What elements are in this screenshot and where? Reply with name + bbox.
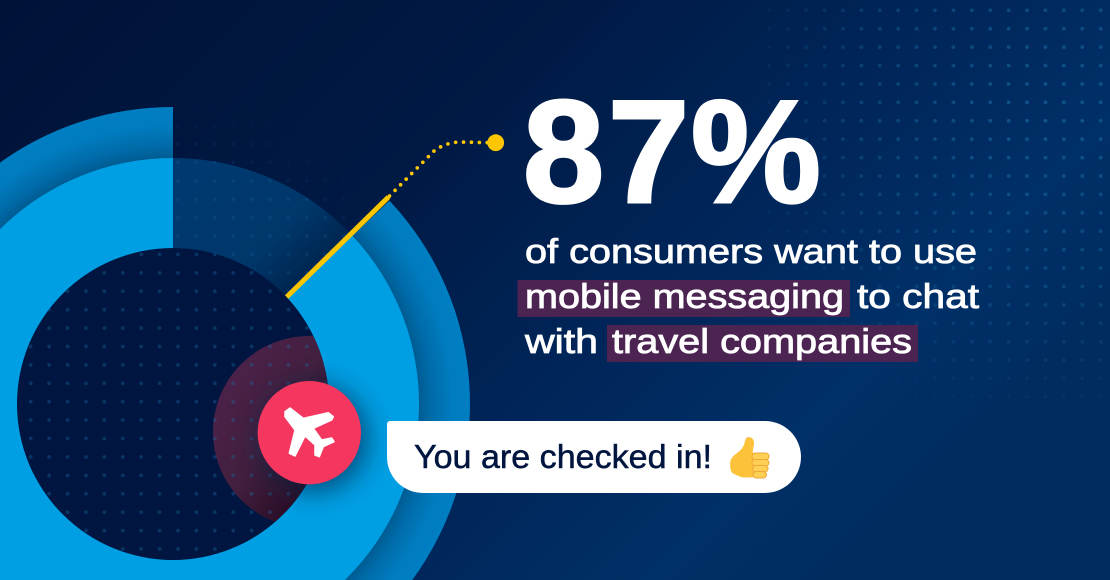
connector end dot xyxy=(487,134,504,151)
dotted connector xyxy=(390,142,489,196)
shadow under plane button xyxy=(260,384,368,492)
dot pattern: top right xyxy=(768,8,1102,380)
statistic: 87%: 87% xyxy=(523,70,821,233)
yellow marker line xyxy=(287,197,388,297)
middle ring sector xyxy=(0,158,419,580)
description text: of consumers want to use xyxy=(525,233,977,271)
chat bubble xyxy=(387,421,801,493)
icon: airplane xyxy=(285,408,334,457)
description text: to chat xyxy=(857,278,980,316)
burgundy accent circle xyxy=(213,336,328,522)
outer ring sector xyxy=(0,107,470,580)
description text: mobile messaging xyxy=(525,278,844,316)
inner dots xyxy=(17,248,329,560)
dot pattern: behind donut xyxy=(176,142,345,219)
donut chart: 87 percent xyxy=(0,107,470,580)
remaining 13 percent wedge xyxy=(173,158,352,404)
wedge dots xyxy=(176,161,346,292)
inner circle xyxy=(17,248,329,560)
bubble text: You are checked in! xyxy=(414,438,712,475)
description text xyxy=(524,233,980,361)
highlight: mobile messaging xyxy=(518,280,850,317)
highlight: travel companies xyxy=(607,325,918,362)
plane button xyxy=(258,381,361,484)
description text: travel companies xyxy=(612,323,912,361)
description text: with xyxy=(524,323,598,361)
icon: thumbs up xyxy=(730,437,769,478)
